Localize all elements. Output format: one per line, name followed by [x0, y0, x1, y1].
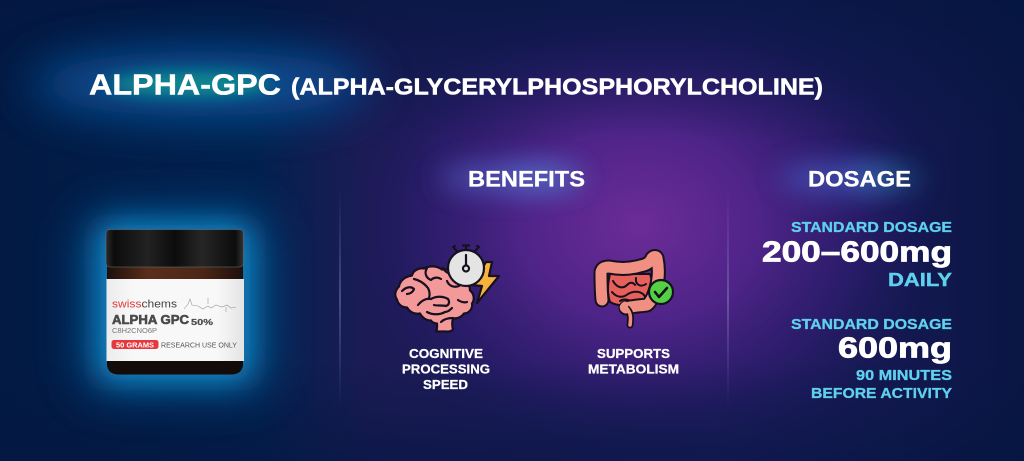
divider right — [728, 188, 729, 408]
heading: benefits: BENEFITS — [468, 166, 585, 192]
research note: RESEARCH USE ONLY — [161, 340, 237, 350]
brain — [395, 266, 474, 332]
dosage block 2: 600mg — [838, 332, 952, 364]
jar lid — [106, 230, 244, 267]
label: cognitive processing speed: COGNITIVE — [409, 347, 483, 361]
heading: dosage: DOSAGE — [808, 166, 911, 192]
lightning — [471, 262, 499, 303]
label: supports metabolism: METABOLISM — [588, 362, 679, 376]
brand: swisschems — [112, 298, 178, 310]
label: cognitive processing speed — [402, 347, 490, 392]
label: cognitive processing speed: SPEED — [423, 378, 468, 392]
dosage block 1: 200–600mg — [762, 236, 952, 268]
icon: intestines with check — [601, 256, 673, 325]
product name: ALPHA GPC — [112, 312, 190, 327]
label: supports metabolism: SUPPORTS — [597, 347, 670, 361]
weight badge — [112, 340, 158, 349]
rectum — [626, 308, 631, 325]
jar label: 50 GRAMS — [116, 342, 154, 350]
small intestine — [608, 274, 652, 306]
check badge — [649, 280, 673, 304]
title — [89, 70, 823, 102]
title: ALPHA-GPC — [89, 70, 281, 102]
stopwatch — [453, 246, 479, 251]
label: cognitive processing speed: PROCESSING — [402, 362, 490, 376]
dosage block 2: 90 MINUTES — [856, 368, 952, 384]
jar body — [107, 262, 243, 374]
dosage block 2: BEFORE ACTIVITY — [811, 386, 952, 402]
large intestine — [601, 256, 658, 308]
dosage block 2 — [791, 317, 952, 402]
icon: brain with stopwatch — [395, 246, 499, 332]
dosage block 1 — [762, 220, 952, 290]
product jar — [106, 230, 244, 374]
dosage block 2: STANDARD DOSAGE — [791, 317, 952, 333]
dosage block 1: STANDARD DOSAGE — [791, 220, 952, 236]
jar label — [106, 279, 244, 361]
molecule — [184, 298, 236, 312]
label: supports metabolism — [588, 347, 679, 376]
divider left — [340, 188, 341, 408]
title: (ALPHA-GLYCERYLPHOSPHORYLCHOLINE) — [291, 74, 823, 100]
dosage block 1: DAILY — [888, 270, 952, 290]
formula: C8H2CNO6P — [112, 326, 157, 335]
jar label: 50% — [191, 317, 214, 327]
